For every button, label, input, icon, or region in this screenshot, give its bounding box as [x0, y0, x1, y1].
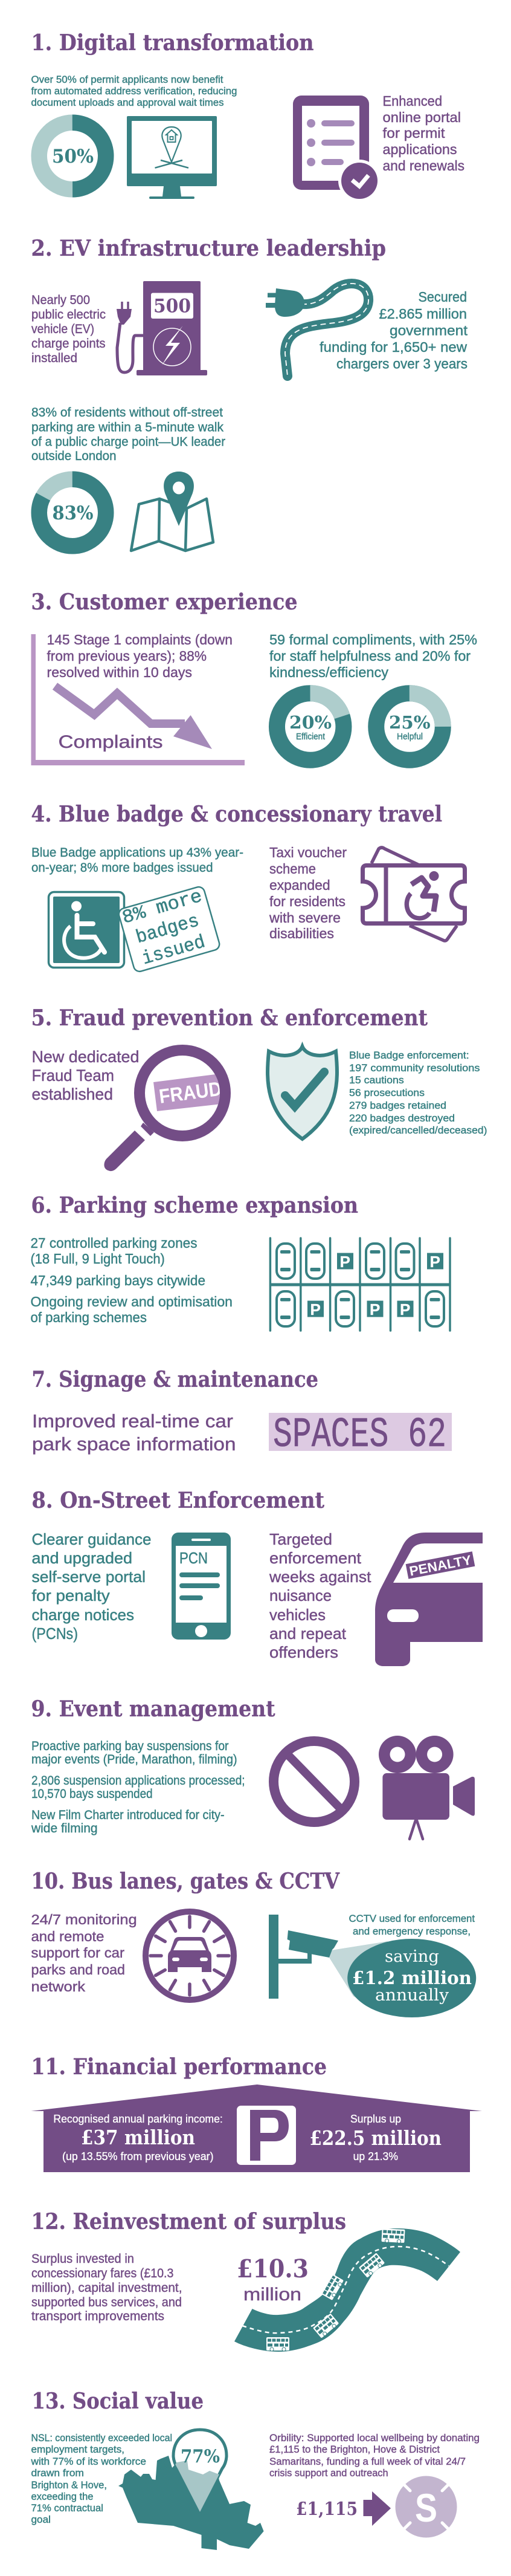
icon: car with penalty notice: [375, 1533, 483, 1666]
text: government funding: chargers over 3 years: [336, 355, 468, 371]
text: complaints: 145 Stage 1 complaints (down: [47, 632, 233, 647]
icon: parking bays grid: [270, 1238, 451, 1331]
text: taxi voucher: Taxi voucher: [269, 845, 347, 860]
section 8: on-street enforcement: [31, 1488, 483, 1666]
callout: saving £1.2 million annually: annually: [375, 1986, 449, 2005]
text: compliments: [269, 632, 477, 680]
heading: 10. Bus lanes, gates & CCTV: [31, 1869, 340, 1894]
text: parking zones and bays: [30, 1235, 233, 1325]
text: real-time information: Improved real-time car: [32, 1410, 233, 1432]
heading: 7. Signage & maintenance: [31, 1367, 318, 1392]
text: parking income: (up 13.55% from previous year): [62, 2150, 214, 2162]
text: parking zones and bays: 47,349 parking bays citywide: [30, 1273, 205, 1288]
text: address verification: [31, 74, 237, 108]
section 5: fraud prevention and enforcement: [31, 1005, 487, 1171]
text: self-serve portal: (PCNs): [31, 1624, 78, 1643]
icon: smartphone PCN: [172, 1533, 231, 1640]
text: government funding: [320, 289, 468, 371]
text: address verification: from automated address verification, reducing: [31, 85, 237, 97]
text: Orbility donation: £1,115 to the Brighton, Hove & District: [269, 2444, 440, 2455]
text: taxi voucher: expanded: [269, 877, 330, 893]
text: government funding: government: [390, 323, 468, 339]
icon: parking bays grid: P: [370, 1300, 380, 1319]
text: walk to charge point: of a public charge point—UK leader: [31, 435, 225, 449]
heading: 6. Parking scheme expansion: [31, 1193, 358, 1218]
icon: EV charger: 500: [153, 295, 191, 317]
donut: 83%: 83%: [52, 502, 93, 524]
icon: CCTV camera with beam: [269, 1915, 388, 2001]
icon: parking bays grid: P: [310, 1300, 321, 1319]
text: targeted enforcement: vehicles: [269, 1606, 326, 1624]
text: charge points: public electric: [31, 307, 106, 322]
text: monitoring: network: [31, 1979, 86, 1994]
callout: saving £1.2 million annually: £1.2 million: [352, 1968, 472, 1989]
text: self-serve portal: for penalty: [31, 1586, 110, 1604]
section 2: EV infrastructure leadership: [31, 236, 468, 551]
text: fraud team: Fraud Team: [31, 1066, 114, 1085]
icon: Brighton map with 77% pin: [118, 2430, 264, 2550]
icon: shield with tick: [268, 1046, 337, 1139]
text: CCTV use: and emergency response,: [353, 1926, 471, 1937]
text: compliments: kindness/efficiency: [269, 664, 389, 680]
text: monitoring: support for car: [31, 1945, 124, 1961]
text: blue badge applications: Blue Badge applications up 43% year-: [31, 845, 243, 860]
text: taxi voucher: disabilities: [269, 926, 334, 941]
chart: complaints trending down: [31, 634, 245, 765]
text: Orbility donation: Orbility: Supported local wellbeing by donating: [269, 2432, 480, 2444]
text: surplus uses: concessionary fares (£10.3: [31, 2266, 173, 2280]
text: surplus uses: Surplus invested in: [31, 2251, 134, 2266]
text: suspensions and film charter: New Film Charter introduced for city-: [31, 1808, 225, 1822]
figure: £1,115: £1,115: [296, 2499, 358, 2520]
icon: magnifying glass over fraud label: FRAUD: [158, 1077, 223, 1108]
heading: 11. Financial performance: [31, 2054, 327, 2080]
text: taxi voucher: for residents: [269, 894, 345, 909]
text: government funding: Secured: [418, 289, 467, 305]
chart: complaints trending down: Complaints: [58, 732, 163, 752]
figure: £10.3 million: million: [243, 2285, 301, 2305]
text: NSL local employment: employment targets,: [31, 2444, 124, 2455]
text: targeted enforcement: [269, 1530, 371, 1661]
icon: parking bays grid: P: [400, 1300, 410, 1319]
text: fraud team: established: [31, 1085, 113, 1103]
donut: 25% helpful: 25%: [389, 712, 431, 733]
text: walk to charge point: outside London: [31, 449, 116, 463]
text: surplus: £22.5 million: [309, 2126, 442, 2150]
text: monitoring: parks and road: [31, 1962, 125, 1977]
icon: monitor with house pin: [127, 116, 217, 199]
text: targeted enforcement: and repeat: [269, 1624, 347, 1643]
icon: car in monitoring dial: [146, 1912, 234, 2000]
text: complaints: from previous years); 88%: [47, 648, 207, 664]
text: targeted enforcement: weeks against: [269, 1568, 371, 1586]
text: compliments: for staff helpfulness and 20% for: [269, 648, 471, 664]
section 12: reinvestment of surplus: [31, 2209, 460, 2352]
icon: prohibition sign: [274, 1741, 355, 1822]
text: parking zones and bays: of parking schemes: [30, 1309, 147, 1325]
donut: 83%: [39, 479, 106, 546]
icon: Brighton map with 77% pin: 77%: [181, 2446, 220, 2467]
text: Orbility donation: [269, 2432, 480, 2479]
text: surplus uses: [31, 2251, 182, 2323]
text: surplus: Surplus up: [350, 2113, 401, 2125]
text: enforcement figures: (expired/cancelled/deceased): [349, 1124, 487, 1136]
figure: £10.3 million: [237, 2254, 309, 2305]
text: walk to charge point: [31, 405, 225, 463]
donut: 20% efficient: 20%: [289, 712, 332, 733]
text: self-serve portal: Clearer guidance: [31, 1530, 151, 1548]
text: parking income: Recognised annual parking income:: [53, 2113, 223, 2125]
text: taxi voucher: [269, 845, 347, 941]
callout: saving £1.2 million annually: [347, 1939, 476, 2017]
text: online portal: [383, 93, 464, 174]
text: enforcement figures: 56 prosecutions: [349, 1087, 425, 1098]
text: enforcement figures: 15 cautions: [349, 1074, 404, 1086]
text: Orbility donation: crisis support and outreach: [269, 2467, 388, 2479]
text: monitoring: [31, 1912, 137, 1994]
heading: 3. Customer experience: [31, 589, 297, 615]
icon: winding road with buses: [234, 2228, 460, 2352]
text: parking zones and bays: Ongoing review and optimisation: [30, 1294, 233, 1309]
text: surplus: up 21.3%: [353, 2150, 398, 2162]
sign: parking P: [237, 2106, 296, 2165]
section 9: event management: [31, 1696, 475, 1839]
text: monitoring: 24/7 monitoring: [31, 1912, 137, 1927]
icon: parking bays grid: P: [339, 1253, 350, 1271]
text: suspensions and film charter: Proactive parking bay suspensions for: [31, 1739, 228, 1753]
text: charge points: installed: [31, 351, 77, 365]
text: complaints: [47, 632, 233, 680]
text: online portal: applications: [383, 141, 457, 157]
donut: 50%: 50%: [52, 146, 94, 167]
panel: car park building with figures: [31, 2084, 482, 2172]
donut: 25% helpful: Helpful: [397, 732, 423, 742]
text: address verification: document uploads and approval wait times: [31, 97, 223, 108]
text: targeted enforcement: offenders: [269, 1643, 338, 1661]
text: fraud team: New dedicated: [31, 1048, 139, 1066]
icon: tablet checklist: [293, 96, 381, 202]
figure: £10.3 million: £10.3: [237, 2254, 309, 2283]
text: NSL local employment: exceeding the: [31, 2491, 93, 2502]
callout: 8% more badges issued tag: [117, 885, 221, 973]
text: CCTV use: [349, 1913, 475, 1937]
text: blue badge applications: on-year; 8% more badges issued: [31, 860, 213, 875]
text: surplus: [309, 2113, 442, 2162]
text: self-serve portal: self-serve portal: [31, 1568, 146, 1586]
heading: 1. Digital transformation: [31, 30, 314, 56]
icon: car with penalty notice: PENALTY: [408, 1552, 473, 1579]
text: parking income: [53, 2113, 223, 2162]
donut: 25% helpful: [376, 693, 443, 760]
callout: 8% more badges issued tag: badges: [133, 910, 202, 949]
text: charge points: [31, 293, 106, 365]
icon: Samaritans logo: [395, 2476, 457, 2538]
callout: 8% more badges issued tag: issued: [140, 932, 208, 970]
text: taxi voucher: with severe: [269, 910, 341, 926]
text: parking income: £37 million: [81, 2126, 195, 2149]
section 1: digital transformation: [31, 30, 464, 202]
text: complaints: resolved within 10 days: [47, 664, 192, 680]
heading: 5. Fraud prevention & enforcement: [31, 1005, 428, 1031]
icon: EV charger: [117, 281, 207, 375]
heading: 12. Reinvestment of surplus: [31, 2209, 346, 2234]
callout: saving £1.2 million annually: saving: [385, 1947, 439, 1966]
text: walk to charge point: parking are within a 5-minute walk: [31, 420, 223, 434]
text: blue badge applications: [31, 845, 243, 875]
text: real-time information: park space information: [32, 1433, 236, 1455]
text: NSL local employment: NSL: consistently exceeded local: [31, 2432, 172, 2444]
text: targeted enforcement: nuisance: [269, 1586, 332, 1604]
icon: plug with road cable: [266, 284, 368, 376]
text: fraud team: [31, 1048, 139, 1103]
text: surplus uses: supported bus services, and: [31, 2295, 182, 2309]
text: surplus uses: transport improvements: [31, 2309, 164, 2323]
text: online portal: online portal: [383, 109, 461, 125]
icon: smartphone PCN: PCN: [179, 1549, 208, 1567]
text: online portal: for permit: [383, 125, 445, 141]
section 7: signage and maintenance: [31, 1367, 452, 1459]
heading: 9. Event management: [31, 1696, 275, 1722]
text: walk to charge point: 83% of residents without off-street: [31, 405, 223, 420]
text: charge points: vehicle (EV): [31, 322, 94, 336]
text: government funding: £2.865 million: [379, 306, 467, 322]
text: parking zones and bays: (18 Full, 9 Light Touch): [30, 1251, 165, 1267]
text: charge points: charge points: [31, 336, 106, 351]
icon: film camera: [379, 1736, 475, 1839]
section 6: parking scheme expansion: [30, 1193, 451, 1331]
heading: 2. EV infrastructure leadership: [31, 236, 386, 261]
text: NSL local employment: goal: [31, 2514, 51, 2525]
text: suspensions and film charter: 2,806 suspension applications processed;: [31, 1773, 245, 1788]
text: Orbility donation: Samaritans, funding a full week of vital 24/7: [269, 2456, 466, 2467]
heading: 4. Blue badge & concessionary travel: [31, 802, 442, 827]
text: compliments: 59 formal compliments, with 25%: [269, 632, 477, 647]
text: enforcement figures: 197 community resolutions: [349, 1062, 480, 1074]
section 13: social value: [30, 2389, 480, 2550]
text: self-serve portal: [31, 1530, 151, 1643]
donut: 20% efficient: [277, 693, 344, 760]
icon: parking bays grid: P: [430, 1253, 440, 1271]
section 10: bus lanes, gates and CCTV: [31, 1869, 476, 2017]
section 3: customer experience: [31, 589, 477, 765]
text: NSL local employment: [30, 2432, 172, 2525]
text: taxi voucher: scheme: [269, 861, 316, 877]
text: suspensions and film charter: wide filming: [31, 1821, 98, 1835]
text: enforcement figures: 220 badges destroyed: [349, 1112, 455, 1124]
text: enforcement figures: [349, 1050, 487, 1136]
icon: map with pin: [131, 472, 213, 551]
icon: accessible taxi voucher: [362, 848, 465, 941]
text: charge points: Nearly 500: [31, 293, 90, 307]
text: online portal: Enhanced: [383, 93, 442, 109]
text: surplus uses: million), capital investment,: [31, 2280, 182, 2295]
text: suspensions and film charter: 10,570 bays suspended: [31, 1786, 153, 1801]
section 4: blue badge and concessionary travel: [31, 802, 465, 973]
text: parking zones and bays: 27 controlled parking zones: [30, 1235, 197, 1251]
text: NSL local employment: drawn from: [31, 2467, 84, 2479]
text: enforcement figures: Blue Badge enforcement:: [349, 1050, 469, 1061]
text: NSL local employment: 71% contractual: [31, 2502, 103, 2514]
icon: blue badge wheelchair sign: [48, 892, 124, 967]
text: self-serve portal: and upgraded: [31, 1549, 132, 1567]
text: enforcement figures: 279 badges retained: [349, 1100, 446, 1111]
section 11: financial performance: [31, 2054, 482, 2172]
text: suspensions and film charter: [31, 1739, 245, 1835]
text: real-time information: [32, 1410, 236, 1455]
text: suspensions and film charter: major events (Pride, Marathon, filming): [31, 1752, 237, 1767]
sign: LCD spaces counter: SPACES 62: [273, 1412, 446, 1459]
heading: 8. On-Street Enforcement: [31, 1488, 324, 1513]
text: targeted enforcement: enforcement: [269, 1549, 362, 1567]
text: monitoring: and remote: [31, 1929, 104, 1944]
donut: 20% efficient: Efficient: [296, 732, 326, 742]
text: government funding: funding for 1,650+ new: [320, 339, 467, 355]
text: online portal: and renewals: [383, 158, 464, 174]
icon: Samaritans logo: S: [415, 2485, 437, 2530]
text: self-serve portal: charge notices: [31, 1606, 134, 1624]
heading: 13. Social value: [31, 2389, 204, 2414]
text: NSL local employment: with 77% of its workforce: [30, 2456, 146, 2467]
callout: 8% more badges issued tag: 8% more: [120, 886, 205, 929]
text: address verification: Over 50% of permit applicants now benefit: [31, 74, 223, 85]
icon: magnifying glass over fraud label: [104, 1050, 225, 1171]
arrow: donation to Samaritans: [364, 2491, 391, 2526]
donut: 50%: [39, 123, 106, 189]
text: targeted enforcement: Targeted: [269, 1530, 332, 1548]
text: NSL local employment: Brighton & Hove,: [31, 2479, 107, 2491]
text: CCTV use: CCTV used for enforcement: [349, 1913, 475, 1924]
